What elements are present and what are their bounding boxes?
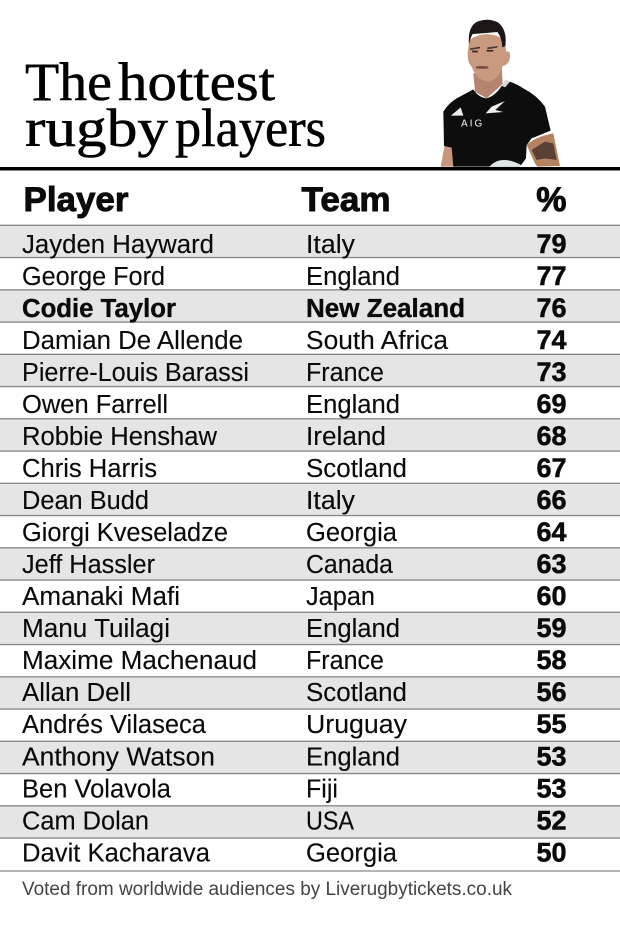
table rows: Allan Dell: [22, 679, 131, 707]
table rows: [0, 225, 620, 871]
title: hottest: [118, 52, 275, 112]
table rows: Fiji: [306, 776, 338, 804]
table rows: 52: [536, 806, 566, 836]
table rows: England: [306, 615, 400, 643]
table header: %: [536, 181, 566, 219]
table rows: Georgia: [306, 840, 398, 868]
table rows: 66: [536, 485, 566, 515]
table rows: George Ford: [22, 263, 165, 291]
table rows: 59: [536, 613, 566, 643]
table rows: Manu Tuilagi: [22, 615, 170, 643]
table rows: 64: [536, 517, 566, 547]
table rows: Andrés Vilaseca: [22, 711, 207, 739]
table rows: England: [306, 263, 400, 291]
title: [25, 52, 326, 158]
table rows: Amanaki Mafi: [22, 583, 180, 611]
title: players: [175, 98, 326, 158]
table rows: 53: [536, 774, 566, 804]
table rows: Canada: [306, 551, 394, 579]
table rows: 69: [536, 389, 566, 419]
player photo: AIG: [461, 119, 483, 130]
table rows: 67: [536, 453, 566, 483]
table rows: 79: [536, 229, 566, 259]
table rows: 63: [536, 549, 566, 579]
table rows: Scotland: [306, 679, 407, 707]
player photo: [441, 20, 560, 167]
table rows: 76: [536, 293, 566, 323]
title: rugby: [25, 98, 168, 158]
table rows: Uruguay: [306, 711, 407, 739]
table rows: 60: [536, 581, 566, 611]
table rows: Cam Dolan: [22, 808, 149, 836]
table rows: Chris Harris: [22, 455, 157, 483]
table header: Player: [24, 181, 128, 219]
table rows: Georgia: [306, 519, 398, 547]
table rows: 53: [536, 742, 566, 772]
table rows: New Zealand: [306, 295, 465, 323]
table rows: South Africa: [306, 327, 449, 355]
table rows: Owen Farrell: [22, 391, 168, 419]
header rule: [0, 167, 620, 170]
table rows: Codie Taylor: [22, 295, 176, 323]
table rows: Maxime Machenaud: [22, 647, 257, 675]
table header: [24, 181, 566, 219]
table rows: Anthony Watson: [22, 744, 215, 772]
title: The: [25, 52, 112, 112]
table rows: Italy: [306, 487, 355, 515]
table rows: 55: [536, 709, 566, 739]
table rows: Scotland: [306, 455, 407, 483]
table rows: Ben Volavola: [22, 776, 172, 804]
table header: Team: [302, 181, 390, 219]
table rows: USA: [306, 808, 354, 836]
table rows: France: [306, 647, 384, 675]
table rows: Jayden Hayward: [22, 231, 214, 259]
table rows: Giorgi Kveseladze: [22, 519, 228, 547]
table rows: France: [306, 359, 384, 387]
table rows: Jeff Hassler: [22, 551, 155, 579]
table rows: Damian De Allende: [22, 327, 243, 355]
table rows: 58: [536, 645, 566, 675]
table rows: Robbie Henshaw: [22, 423, 218, 451]
table rows: Pierre-Louis Barassi: [22, 359, 249, 387]
table rows: England: [306, 391, 400, 419]
table rows: 74: [536, 325, 566, 355]
table rows: 50: [536, 838, 566, 868]
table rows: Dean Budd: [22, 487, 149, 515]
table rows: 56: [536, 677, 566, 707]
source note: Voted from worldwide audiences by Liverugbytickets.co.uk: [22, 879, 512, 900]
table rows: England: [306, 744, 400, 772]
table rows: Ireland: [306, 423, 386, 451]
table rows: Italy: [306, 231, 355, 259]
table rows: Japan: [306, 583, 375, 611]
table rows: 73: [536, 357, 566, 387]
table rows: 77: [536, 261, 566, 291]
table rows: 68: [536, 421, 566, 451]
table rows: Davit Kacharava: [22, 840, 211, 868]
